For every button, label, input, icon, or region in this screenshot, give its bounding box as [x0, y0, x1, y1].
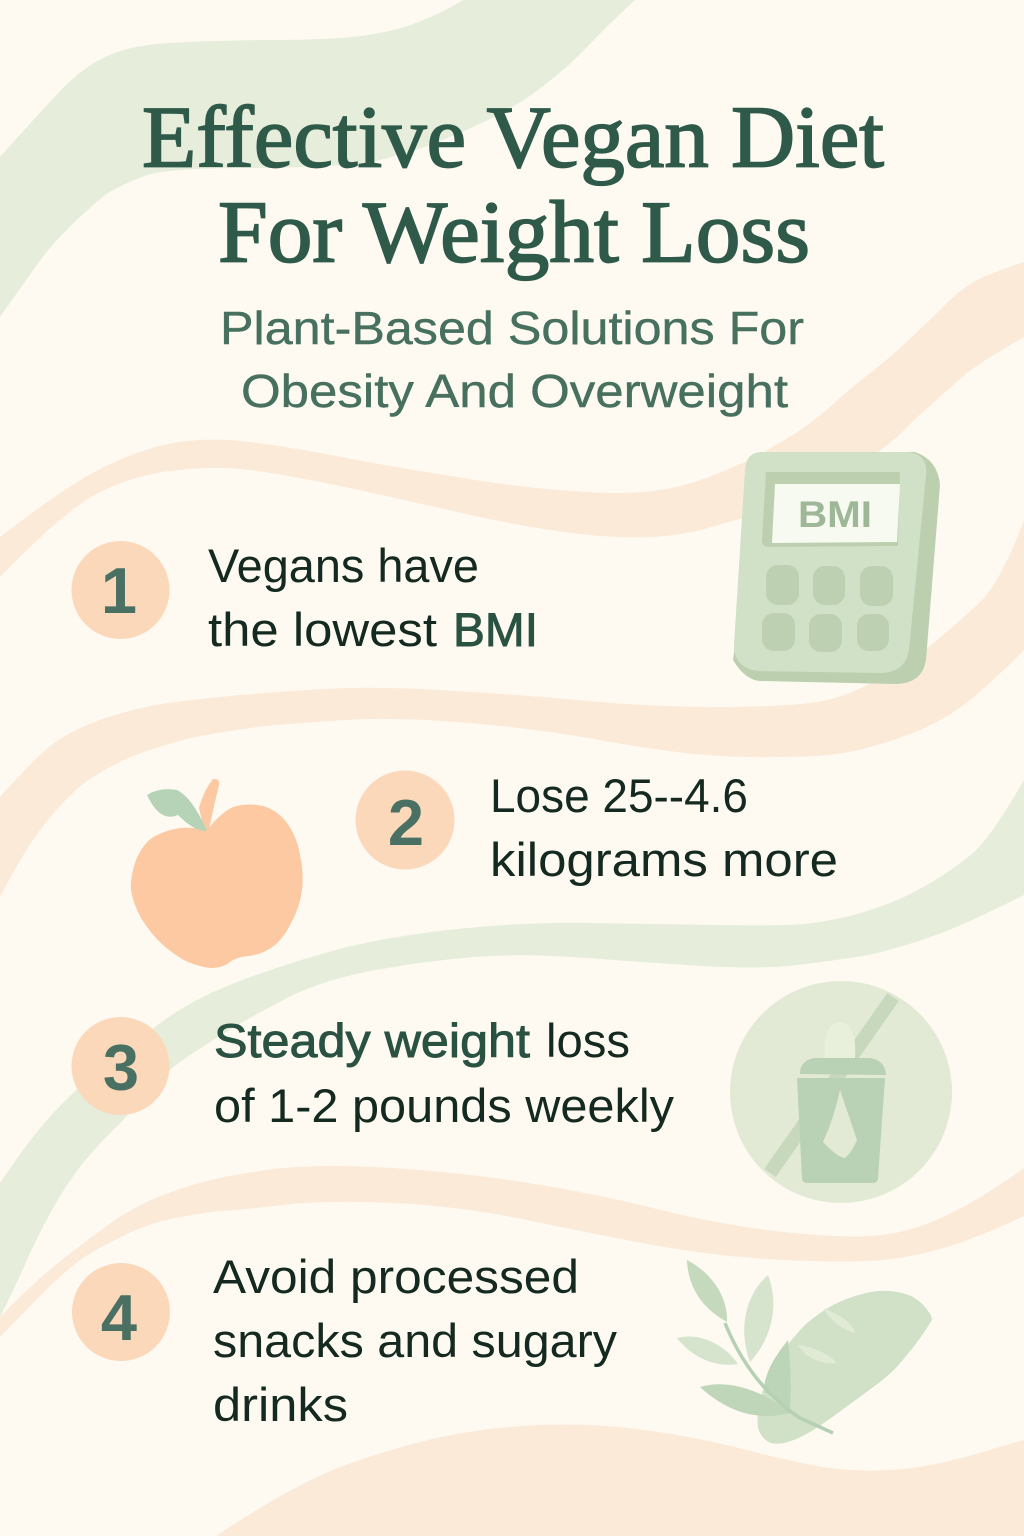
icon: BMI calculator: BMI [798, 494, 872, 535]
text: lowest BMI: the lowest [208, 603, 437, 656]
panel: item 1 [72, 452, 940, 684]
text: lowest BMI: Vegans have [208, 539, 479, 592]
text: avoid processed snacks: snacks and sugary [213, 1314, 618, 1367]
subtitle: Obesity And Overweight [241, 365, 788, 417]
panel: item 4 [72, 1250, 932, 1444]
title [142, 90, 884, 282]
text: lowest BMI: BMI [453, 603, 538, 656]
icon: apple [131, 779, 303, 968]
title: Effective Vegan Diet [142, 90, 884, 186]
icon: BMI calculator [733, 452, 940, 684]
number badge 4: 4 [101, 1281, 137, 1354]
text: steady weight loss: of 1-2 pounds weekly [214, 1079, 675, 1132]
text: steady weight loss: Steady weight [214, 1014, 530, 1067]
number badge 1: 1 [101, 554, 137, 627]
text: steady weight loss: loss [546, 1014, 630, 1067]
subtitle: Plant-Based Solutions For [220, 302, 804, 354]
text: avoid processed snacks [213, 1250, 618, 1431]
text: avoid processed snacks: drinks [213, 1378, 348, 1431]
text: kilograms lost [490, 769, 838, 886]
number badge 1 [72, 541, 170, 639]
panel: item 2 [131, 769, 838, 968]
number badge 2 [356, 770, 454, 870]
text: avoid processed snacks: Avoid processed [213, 1250, 579, 1303]
panel: item 3 [72, 981, 952, 1203]
text: kilograms lost: kilograms more [490, 833, 838, 886]
number badge 4 [72, 1263, 170, 1361]
icon: no sugary drink [730, 981, 952, 1203]
text: lowest BMI [208, 539, 538, 656]
subtitle [220, 302, 804, 417]
text: steady weight loss [214, 1014, 675, 1132]
text: kilograms lost: Lose 25--4.6 [490, 769, 748, 822]
icon: leaves and bread [677, 1260, 932, 1444]
number badge 2: 2 [388, 786, 424, 859]
number badge 3 [72, 1017, 170, 1115]
title: For Weight Loss [218, 184, 810, 282]
number badge 3: 3 [103, 1031, 139, 1104]
